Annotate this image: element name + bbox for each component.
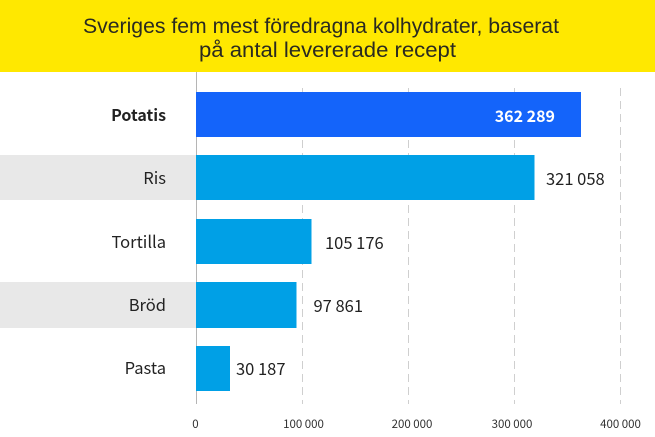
title banner [0, 0, 655, 72]
bar: Bröd: Bröd [129, 292, 166, 316]
bar: Ris [143, 155, 605, 200]
bar: Tortilla: 105 176 [325, 230, 384, 254]
bar: Ris: 321 058 [546, 166, 605, 190]
bar: Tortilla [112, 219, 384, 264]
bar: Bröd [129, 282, 363, 328]
x axis labels: 0 [192, 416, 199, 432]
bar: Pasta: 30 187 [236, 356, 285, 380]
bar: Potatis: Potatis [111, 102, 166, 126]
title banner: Sveriges fem mest föredragna kolhydrater, baserat [83, 15, 559, 38]
row stripes [0, 155, 196, 328]
x axis labels: 300 000 [492, 416, 532, 432]
bar: Ris: Ris [143, 165, 166, 189]
x axis labels: 200 000 [392, 416, 432, 432]
title banner: på antal levererade recept [199, 39, 456, 62]
bar: Potatis: 362 289 [495, 103, 555, 127]
x axis labels: 100 000 [283, 416, 324, 432]
bar: Bröd: 97 861 [314, 293, 363, 317]
x axis labels: 400 000 [600, 416, 641, 432]
bar: Pasta [125, 346, 285, 391]
bar: Pasta: Pasta [125, 355, 166, 379]
x axis labels [192, 416, 641, 432]
bar: Tortilla: Tortilla [112, 229, 166, 253]
bar: Potatis [111, 92, 581, 137]
